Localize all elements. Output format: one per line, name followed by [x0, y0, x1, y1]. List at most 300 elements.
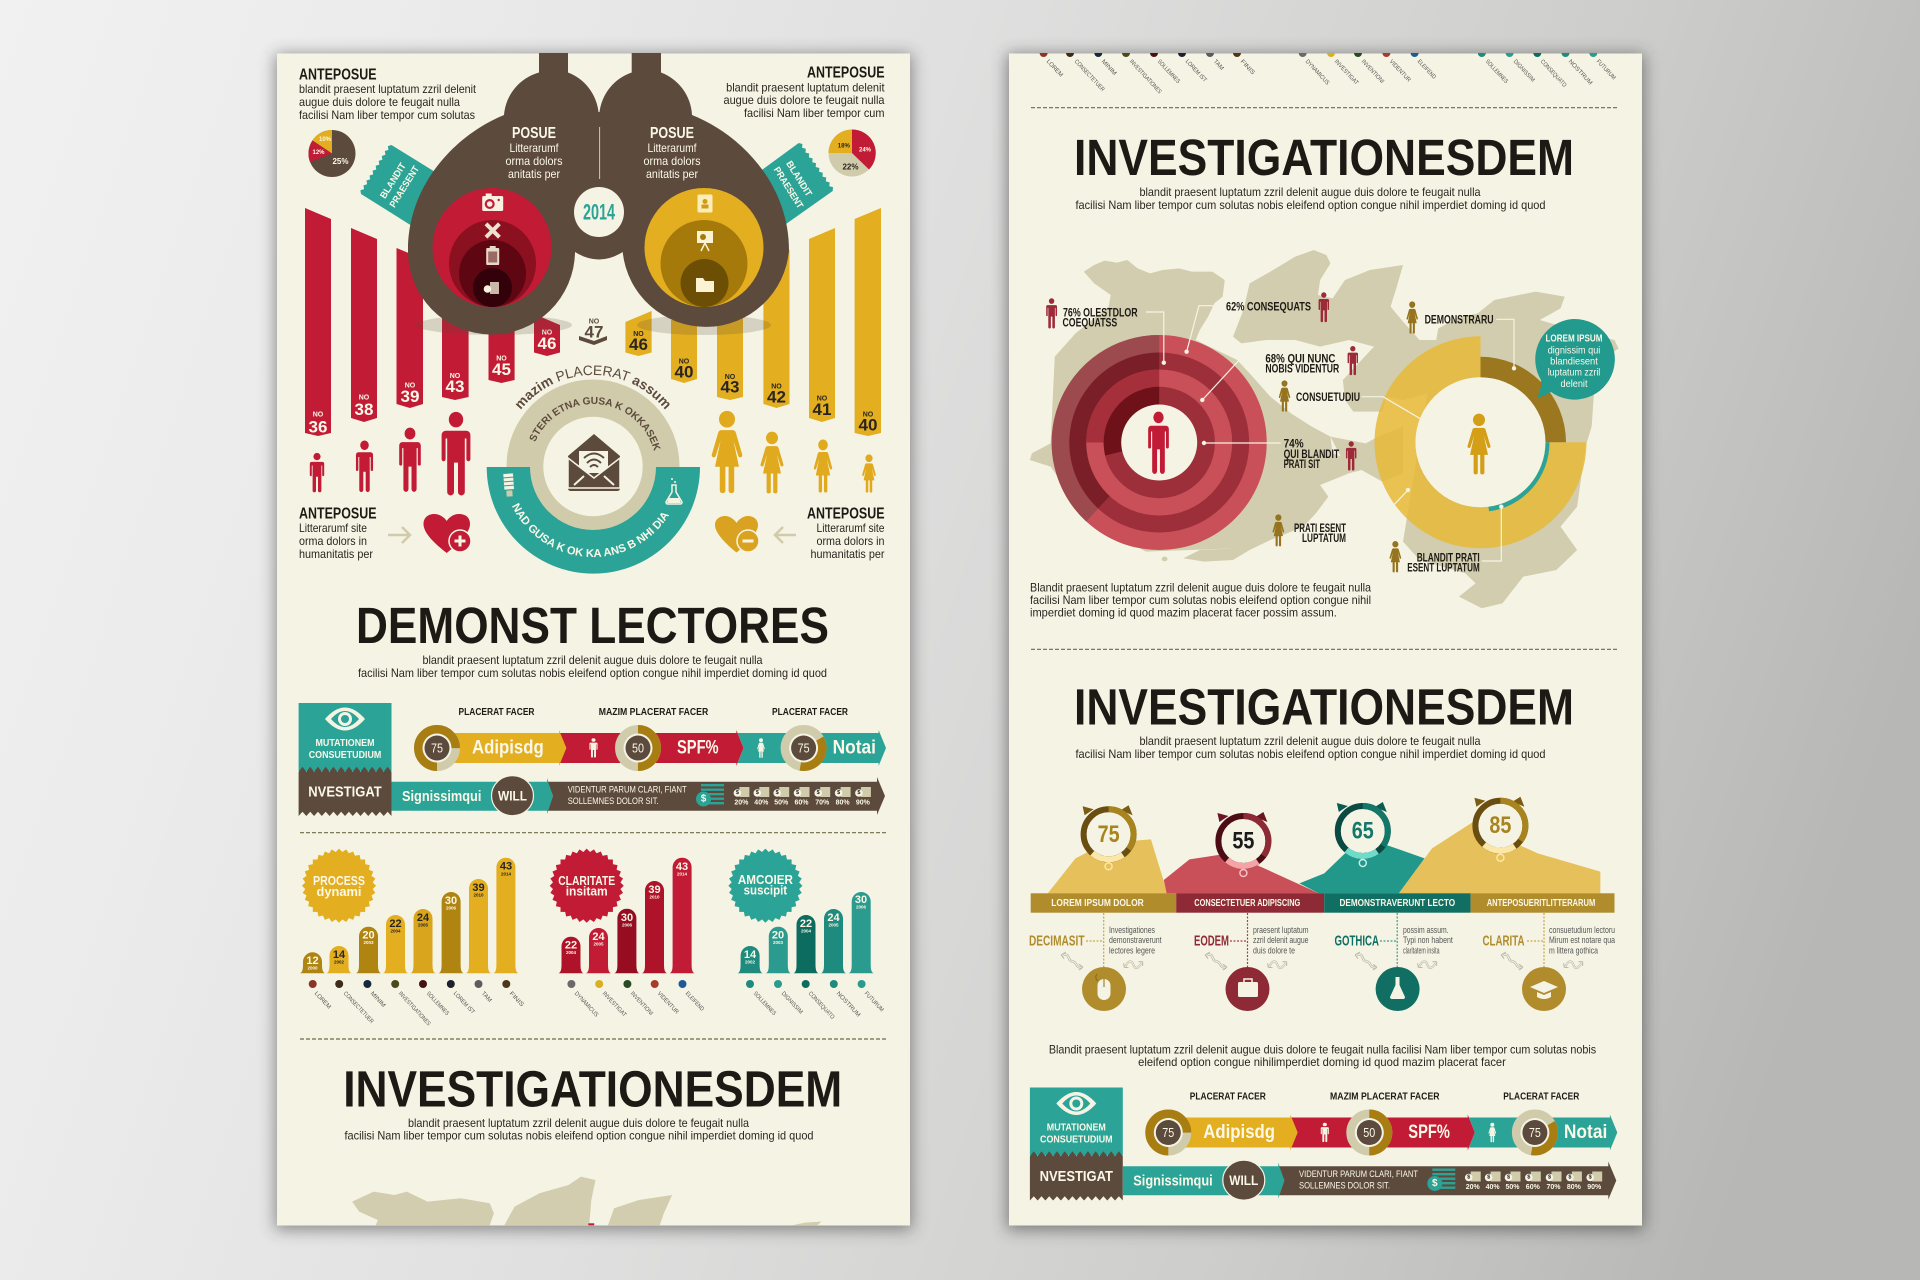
- column: decimasit: DECIMASIT: [1029, 932, 1084, 950]
- leader lines: [1146, 306, 1514, 561]
- bar chart: teal: 14: [744, 949, 757, 961]
- subtitle text middle: facilisi Nam liber tempor cum solutas nobis eleifend option congue nihil imperdiet doming id quod: [1076, 747, 1546, 761]
- legend carry-over at panel top: SOLLEMNES: [1156, 59, 1181, 85]
- map label: 76 percent: COEQUATSS: [1062, 316, 1117, 330]
- band: category header: ANTEPOSUERITLITTERARUM: [1487, 898, 1595, 909]
- percent scale: 50%: [1505, 1184, 1520, 1191]
- bar chart: teal: 2006: [856, 904, 867, 910]
- legend carry-over at panel top: INVENTIONI: [1360, 59, 1385, 85]
- legend carry-over at panel top: DIGNISSIM: [1512, 59, 1535, 84]
- callout: lorem ipsum bubble: delenit: [1560, 378, 1588, 390]
- icon: camera: [482, 194, 503, 211]
- ribbon: blandit praesent left: [360, 145, 440, 226]
- callout: lorem ipsum bubble: dignissim qui: [1548, 344, 1600, 356]
- bar chart: red: 2010: [649, 894, 660, 900]
- map label: consuetudiu: CONSUETUDIU: [1296, 390, 1360, 404]
- legend: dots and rotated labels: MINIM: [369, 991, 386, 1009]
- percent scale: 60%: [794, 800, 809, 806]
- headers: MAZIM PLACERAT FACER: [1330, 1090, 1440, 1102]
- percent scale: 70%: [1546, 1184, 1561, 1191]
- gauge: 75: 75: [1098, 821, 1120, 848]
- map fragment at left panel bottom: [352, 1177, 821, 1225]
- percent scale: [1465, 1172, 1602, 1191]
- legend: dots and rotated labels: VIDENTUR: [656, 991, 680, 1016]
- bar chart: red: [558, 858, 695, 973]
- percent scale: $: [1568, 1174, 1571, 1180]
- percent scale: 80%: [836, 800, 850, 806]
- legend: dots and rotated labels: FUTURUM: [863, 991, 884, 1013]
- text block: map paragraph: [1030, 580, 1371, 620]
- subtitle text top: blandit praesent luptatum zzril delenit augue duis dolore te feugait nulla: [1140, 185, 1481, 199]
- binocular right text: Litterarumf: [648, 141, 697, 155]
- band labels: [472, 738, 876, 758]
- bar chart: red: 24: [592, 931, 605, 943]
- legend: dots and rotated labels: TAM: [480, 991, 492, 1004]
- legend: dots and rotated labels: SOLLEMNES: [752, 991, 777, 1017]
- percent scale: 40%: [1486, 1184, 1500, 1191]
- bar chart: teal: [738, 892, 874, 973]
- percent scale: $: [1548, 1174, 1551, 1180]
- arrow band: teal notai: [1469, 1114, 1617, 1150]
- legend: dots and rotated labels: DYNAMICUS: [573, 991, 599, 1018]
- band labels: [1203, 1122, 1607, 1143]
- title: demonst lectores: DEMONST LECTORES: [356, 597, 829, 654]
- chart: red concentric rings: [1052, 335, 1267, 550]
- percent scale: $: [796, 790, 799, 796]
- donut: 50: 50: [632, 740, 644, 756]
- legend carry-over at panel top: [1040, 53, 1616, 94]
- map: landmass: [1030, 250, 1619, 608]
- donut: 75 second: 75: [798, 740, 810, 756]
- callout: lorem ipsum bubble: [1535, 319, 1615, 400]
- bar labels: red: NO: [542, 330, 553, 336]
- gauge: 85: 85: [1489, 812, 1511, 839]
- text block: anteposue top right: facilisi Nam liber tempor cum: [744, 106, 884, 120]
- donut: 50: 50: [1363, 1125, 1375, 1140]
- binocular right text: orma dolors: [644, 154, 700, 168]
- legend: dots and rotated labels: DIGNISSIM: [780, 991, 803, 1016]
- band labels: Notai: [1564, 1122, 1607, 1143]
- percent scale: $: [1487, 1174, 1490, 1180]
- icon: heart minus: [715, 516, 759, 552]
- table: mutationem flow: [299, 703, 886, 816]
- arrow band: red spf: [1291, 1114, 1475, 1150]
- text block: anteposue bottom right: [807, 506, 885, 561]
- column: decimasit: [1029, 913, 1162, 1011]
- callout: lorem ipsum bubble: luptatum zzril: [1548, 367, 1600, 379]
- map label: 76 percent: [1046, 298, 1138, 330]
- map label: 74 percent: QUI BLANDIT: [1284, 447, 1340, 461]
- map label: 68 percent: [1265, 346, 1358, 376]
- band labels: Adipisdg: [1203, 1122, 1275, 1143]
- text block: lower paragraph: eleifend option congue nihilimperdiet doming id quod mazim placerat facer: [1138, 1055, 1506, 1069]
- bar labels: red: 39: [401, 387, 419, 406]
- icon: envelope with wifi: [568, 434, 620, 491]
- legend carry-over at panel top: CONSEQUATO: [1539, 59, 1567, 89]
- band: category header: LOREM IPSUM DOLOR: [1051, 898, 1144, 909]
- mountain area chart: [1048, 822, 1600, 893]
- legend: dots and rotated labels: NOSTRUM: [835, 991, 861, 1018]
- percent scale: $: [817, 790, 820, 796]
- bar labels: red: 38: [355, 400, 373, 419]
- bar labels: red: NO: [450, 373, 461, 380]
- column: gothica: Typi non habent: [1403, 935, 1453, 946]
- pie chart: left: 12%: [312, 150, 325, 156]
- ribbon: blandit praesent left: BLANDIT: [378, 161, 409, 201]
- badge: claritate insitam: CLARITATE: [558, 873, 615, 888]
- headers: PLACERAT FACER: [458, 706, 535, 718]
- percent scale: 90%: [856, 800, 871, 806]
- text block: anteposue top left: [299, 66, 477, 122]
- bar labels: red: 46: [538, 334, 556, 353]
- band: category header: CONSECTETUER ADIPISCING: [1194, 898, 1300, 909]
- block: nvestigat: [1030, 1151, 1123, 1200]
- bar chart: red: 39: [648, 884, 661, 896]
- bar labels: red: 43: [446, 377, 464, 396]
- arrow band: teal notai: [738, 730, 886, 766]
- badge: will: WILL: [498, 788, 527, 804]
- block: mutationem: CONSUETUDIUM: [309, 749, 381, 761]
- bar chart: teal: 2005: [828, 922, 839, 928]
- pie chart: right: 24%: [859, 148, 872, 154]
- binoculars illustration: [408, 53, 789, 334]
- marker: number 47: NO: [589, 318, 600, 326]
- column: decimasit: lectores legere: [1109, 946, 1155, 956]
- donut: 75 first: 75: [1162, 1125, 1174, 1140]
- bar chart: teal: 2003: [773, 940, 784, 945]
- subtitle text middle: [1076, 734, 1546, 761]
- binocular right text: anitatis per: [646, 167, 698, 181]
- legend: dots and rotated labels: CONSEQUATO: [807, 991, 835, 1021]
- title: investigationesdem top: INVESTIGATIONESDEM: [1074, 129, 1574, 186]
- gauge: 65: [1328, 796, 1398, 866]
- legend carry-over at panel top: DYNAMICUS: [1304, 59, 1330, 86]
- bar chart: red: 2014: [677, 872, 688, 876]
- pie chart: left: 10%: [319, 137, 332, 143]
- map label: 68 percent: 68% QUI NUNC: [1265, 352, 1336, 366]
- pie chart: right: 22%: [842, 162, 859, 172]
- badge: amcoier suscipit: AMCOIER: [738, 872, 793, 887]
- percent scale: 60%: [1526, 1184, 1541, 1191]
- bar labels: gold: [629, 331, 877, 434]
- column: eodem: [1194, 913, 1309, 1011]
- year badge: [574, 187, 624, 237]
- ribbon: blandit praesent right: BLANDIT: [783, 159, 814, 199]
- map label: demonstraru: DEMONSTRARU: [1425, 312, 1494, 326]
- percent scale: 50%: [774, 800, 789, 806]
- table: mutationem flow repeat: [1030, 1088, 1617, 1200]
- column: clarita: [1482, 913, 1616, 1011]
- gauge: 65: 65: [1352, 818, 1374, 844]
- percent scale: 20%: [734, 800, 749, 806]
- icon: money: [484, 282, 499, 294]
- binocular left text: Litterarumf: [510, 141, 559, 155]
- icon: coin stack: [696, 784, 724, 806]
- icon: clipboard: [486, 246, 499, 265]
- column: clarita: CLARITA: [1482, 932, 1525, 950]
- donut: 75 second: [779, 723, 828, 773]
- lens: gold concentric: [644, 188, 764, 307]
- badge: amcoier suscipit: [728, 849, 802, 923]
- badge: process dynami: [302, 849, 376, 923]
- legend carry-over at panel top: CONSECTETUER: [1073, 59, 1106, 93]
- headers: PLACERAT FACER: [772, 706, 848, 718]
- map label: blandit prati: BLANDIT PRATI: [1417, 551, 1480, 565]
- pie chart: right: 18%: [838, 144, 850, 150]
- percent scale: $: [756, 790, 759, 796]
- donut: 75 first: [1150, 1114, 1186, 1150]
- bar chart: gold: 22: [389, 918, 402, 930]
- map label: 68 percent: NOBIS VIDENTUR: [1265, 362, 1339, 376]
- binocular left text: [506, 125, 562, 181]
- band labels: Notai: [833, 738, 876, 758]
- column: clarita: m littera gothica: [1549, 946, 1599, 956]
- map label: 74 percent: PRATI SIT: [1284, 457, 1321, 471]
- legend carry-over at panel top: FUTURUM: [1595, 59, 1616, 81]
- icon: center man: [1148, 412, 1169, 474]
- subtitle text: facilisi Nam liber tempor cum solutas nobis eleifend option congue nihil imperdiet doming id quod: [358, 666, 827, 680]
- bar chart: teal: 2002: [745, 960, 756, 964]
- text block: anteposue bottom right: ANTEPOSUE: [807, 506, 885, 522]
- legend: dots and rotated labels: LOREM IST: [452, 991, 475, 1016]
- bar chart: gold: 2003: [363, 940, 374, 945]
- band labels: SPF%: [1408, 1122, 1450, 1143]
- bar chart: red: 2005: [593, 942, 604, 946]
- binoculars shadow: [416, 315, 771, 335]
- icon: address book: [698, 194, 712, 212]
- people: gold women: [712, 411, 876, 493]
- center emblem: ring, arcs and envelope: [486, 366, 700, 574]
- block: mutationem: [299, 703, 392, 771]
- percent scale: $: [857, 790, 860, 796]
- legend carry-over at panel top: LOREM: [1045, 59, 1064, 78]
- map label: 74 percent: 74%: [1284, 437, 1304, 451]
- ribbon: blandit praesent right: PRAESENT: [771, 165, 805, 211]
- column: eodem: praesent luptatum: [1253, 925, 1309, 936]
- block: mutationem: CONSUETUDIUM: [1040, 1134, 1113, 1146]
- bar labels: gold: 41: [813, 400, 831, 419]
- arrow band: teal signissimqui: Signissimqui: [402, 788, 481, 805]
- bar labels: red: 36: [309, 417, 327, 436]
- bar chart: red: 43: [676, 861, 688, 873]
- text block: anteposue bottom left: humanitatis per: [299, 547, 373, 561]
- bar labels: red: 45: [492, 360, 511, 379]
- headers: [458, 706, 848, 718]
- pie chart: left: 25%: [332, 157, 349, 166]
- bar chart: gold: [300, 858, 518, 973]
- bar chart: gold: 24: [417, 912, 430, 924]
- text block: anteposue bottom right: humanitatis per: [810, 547, 884, 561]
- legend carry-over at panel top: INVESTIGAT: [1333, 59, 1359, 87]
- percent scale: 90%: [1587, 1184, 1602, 1191]
- icon: heart plus: [424, 514, 471, 553]
- arrow band: brown notes: [548, 777, 885, 815]
- arrow band: brown notes: VIDENTUR PARUM CLARI, FIANT: [1299, 1169, 1418, 1180]
- bar chart: teal: 24: [827, 912, 840, 924]
- map label: blandit prati: [1390, 541, 1480, 575]
- binocular right text: POSUE: [650, 125, 694, 142]
- headers: PLACERAT FACER: [1503, 1090, 1580, 1102]
- subtitle text top: facilisi Nam liber tempor cum solutas nobis eleifend option congue nihil imperdiet doming id quod: [1076, 198, 1546, 212]
- text block: anteposue top left: augue duis dolore te feugait nulla: [299, 95, 460, 109]
- arrow band: brown notes: VIDENTUR PARUM CLARI, FIANT: [568, 784, 687, 796]
- legend: dots and rotated labels: CONSECTETUER: [342, 991, 375, 1025]
- block: nvestigat: NVESTIGAT: [1040, 1168, 1113, 1185]
- badge: will: [492, 776, 534, 816]
- bars: gold numbered columns: [625, 208, 881, 436]
- badge: claritate insitam: insitam: [566, 884, 608, 898]
- subtitle text: [358, 653, 827, 680]
- bar labels: gold: 46: [629, 335, 648, 354]
- legend: dots and rotated labels: [309, 980, 884, 1027]
- legend carry-over at panel top: VIDENTUR: [1388, 59, 1412, 84]
- column: decimasit: Investigationes: [1109, 925, 1155, 936]
- text block: lower paragraph: [1049, 1042, 1596, 1069]
- column: gothica: [1334, 913, 1453, 1011]
- icon: center woman: [1468, 414, 1490, 474]
- legend carry-over at panel top: TAM: [1212, 59, 1224, 72]
- arrow band: teal signissimqui: [1123, 1162, 1284, 1198]
- map label: prati esent: PRATI ESENT: [1294, 521, 1346, 535]
- map label: prati esent: [1273, 514, 1346, 546]
- percent scale: 80%: [1567, 1184, 1582, 1191]
- arc text: steri etna: STERI ETNA GUSA K OKKASEK: [530, 396, 661, 451]
- column: gothica: GOTHICA: [1334, 932, 1379, 950]
- band: category header: DEMONSTRAVERUNT LECTO: [1339, 898, 1455, 909]
- gauge: 85: [1466, 791, 1535, 861]
- percent scale: 40%: [754, 800, 769, 806]
- panel: left poster: [277, 53, 910, 1226]
- binocular right text: [644, 125, 700, 181]
- subtitle text: blandit praesent luptatum zzril delenit augue duis dolore te feugait nulla: [422, 653, 763, 667]
- subtitle text left: facilisi Nam liber tempor cum solutas nobis eleifend option congue nihil imperdiet doming id quod: [344, 1129, 814, 1143]
- bar chart: teal: 22: [800, 918, 812, 930]
- text block: anteposue bottom right: orma dolors in: [816, 534, 884, 548]
- icon: presentation board: [697, 231, 713, 251]
- text block: anteposue bottom right: Litterarumf site: [816, 521, 885, 535]
- map label: 74 percent: [1284, 437, 1356, 471]
- bar chart: gold: 20: [362, 930, 375, 942]
- chart: gold donut: [1374, 336, 1586, 548]
- bar labels: red: NO: [313, 412, 324, 418]
- map label: 62 percent: [1226, 292, 1329, 322]
- percent scale: $: [1589, 1174, 1592, 1180]
- text block: anteposue top right: ANTEPOSUE: [807, 64, 885, 82]
- text block: map paragraph: facilisi Nam liber tempor cum solutas nobis eleifend option congue nihil: [1030, 593, 1371, 607]
- map label: prati esent: LUPTATUM: [1302, 531, 1346, 545]
- text block: map paragraph: imperdiet doming id quod mazim placerat facer possim assum.: [1030, 606, 1337, 620]
- bars: red numbered columns: [305, 208, 560, 436]
- title: investigationesdem left: INVESTIGATIONESDEM: [343, 1060, 842, 1118]
- legend: dots and rotated labels: FINIS: [508, 991, 524, 1008]
- bar chart: gold: 2000: [307, 966, 318, 970]
- bar chart: teal: 20: [772, 930, 784, 942]
- icon: flask: [666, 478, 682, 504]
- callout: lorem ipsum bubble: LOREM IPSUM: [1546, 333, 1603, 345]
- bar labels: gold: NO: [863, 412, 874, 418]
- bar chart: teal: 2004: [801, 928, 812, 934]
- text block: anteposue top left: blandit praesent luptatum zzril delenit: [299, 82, 477, 96]
- column: clarita: Mirum est notare qua: [1549, 935, 1616, 946]
- band labels: Adipisdg: [472, 738, 544, 758]
- binocular left text: anitatis per: [508, 167, 560, 181]
- bar chart: gold: 12: [306, 955, 319, 967]
- text block: anteposue bottom left: [299, 506, 377, 561]
- subtitle text middle: blandit praesent luptatum zzril delenit augue duis dolore te feugait nulla: [1140, 734, 1481, 748]
- bar chart: gold: 39: [472, 882, 485, 894]
- bar labels: gold: NO: [817, 396, 828, 402]
- legend: dots and rotated labels: SOLLEMNES: [425, 991, 450, 1017]
- text block: anteposue top right: augue duis dolore te feugait nulla: [724, 93, 885, 107]
- headers: [1190, 1090, 1580, 1102]
- subtitle text left: [344, 1116, 814, 1143]
- band labels: SPF%: [677, 738, 719, 758]
- bar chart: red: 2006: [622, 922, 633, 928]
- bar labels: gold: 43: [721, 378, 739, 396]
- donut: 75 second: [1510, 1108, 1559, 1157]
- arrow band: gold adipisdg: [1183, 1114, 1298, 1150]
- bar chart: gold: 2004: [390, 928, 401, 934]
- map label: blandit prati: ESENT LUPTATUM: [1407, 561, 1480, 575]
- callout: lorem ipsum bubble: blandiesent: [1550, 355, 1598, 367]
- legend carry-over at panel top: MINIM: [1100, 59, 1117, 77]
- map label: 62 percent: 62% CONSEQUATS: [1226, 300, 1311, 314]
- donut: 50: [620, 730, 656, 766]
- legend carry-over at panel top: INVESTIGATIONES: [1128, 59, 1162, 95]
- percent scale: [734, 787, 871, 806]
- block: mutationem: MUTATIONEM: [1047, 1122, 1106, 1134]
- donut: 75 second: 75: [1529, 1125, 1541, 1140]
- bar chart: teal: 30: [855, 894, 867, 906]
- bar labels: red: NO: [359, 394, 370, 402]
- pie chart: left: [308, 130, 356, 177]
- badge: process dynami: dynami: [316, 884, 362, 899]
- gauge: 75: [1074, 799, 1143, 870]
- legend carry-over at panel top: LOREM IST: [1184, 59, 1207, 84]
- map label: demonstraru: [1406, 301, 1494, 334]
- year badge: 2014: [583, 200, 615, 224]
- column: gothica: possim assum.: [1403, 925, 1449, 936]
- bar chart: gold: 2002: [334, 960, 345, 964]
- ribbon: blandit praesent right: [755, 143, 833, 224]
- badge: will: WILL: [1229, 1172, 1259, 1188]
- legend carry-over at panel top: ELEIFEND: [1416, 59, 1437, 81]
- bar chart: gold: 2010: [473, 892, 484, 898]
- people: red men: [310, 412, 470, 495]
- panel: right poster: [1009, 49, 1642, 1226]
- bar chart: gold: 14: [333, 949, 346, 961]
- legend: dots and rotated labels: LOREM: [313, 991, 332, 1010]
- marker: number 47: [579, 318, 607, 345]
- legend: dots and rotated labels: INVESTIGAT: [601, 991, 627, 1019]
- bar labels: red: NO: [496, 356, 507, 362]
- arrow: left pointing: [775, 527, 796, 543]
- bar labels: gold: 42: [767, 388, 786, 406]
- binocular left text: POSUE: [512, 125, 556, 142]
- badge: process dynami: PROCESS: [313, 873, 365, 888]
- percent scale: $: [776, 790, 779, 796]
- legend carry-over at panel top: NOSTRUM: [1567, 59, 1593, 86]
- text block: anteposue top left: ANTEPOSUE: [299, 66, 377, 84]
- column: eodem: zzril delenit augue: [1253, 935, 1308, 946]
- map label: 76 percent: 76% OLESTDLOR: [1063, 306, 1138, 320]
- block: nvestigat: [299, 767, 391, 816]
- percent scale: $: [1467, 1174, 1470, 1180]
- bar chart: gold: 2006: [446, 906, 457, 910]
- text block: anteposue top right: [724, 64, 885, 120]
- lens: red concentric: [432, 188, 552, 307]
- percent scale: 70%: [815, 800, 830, 806]
